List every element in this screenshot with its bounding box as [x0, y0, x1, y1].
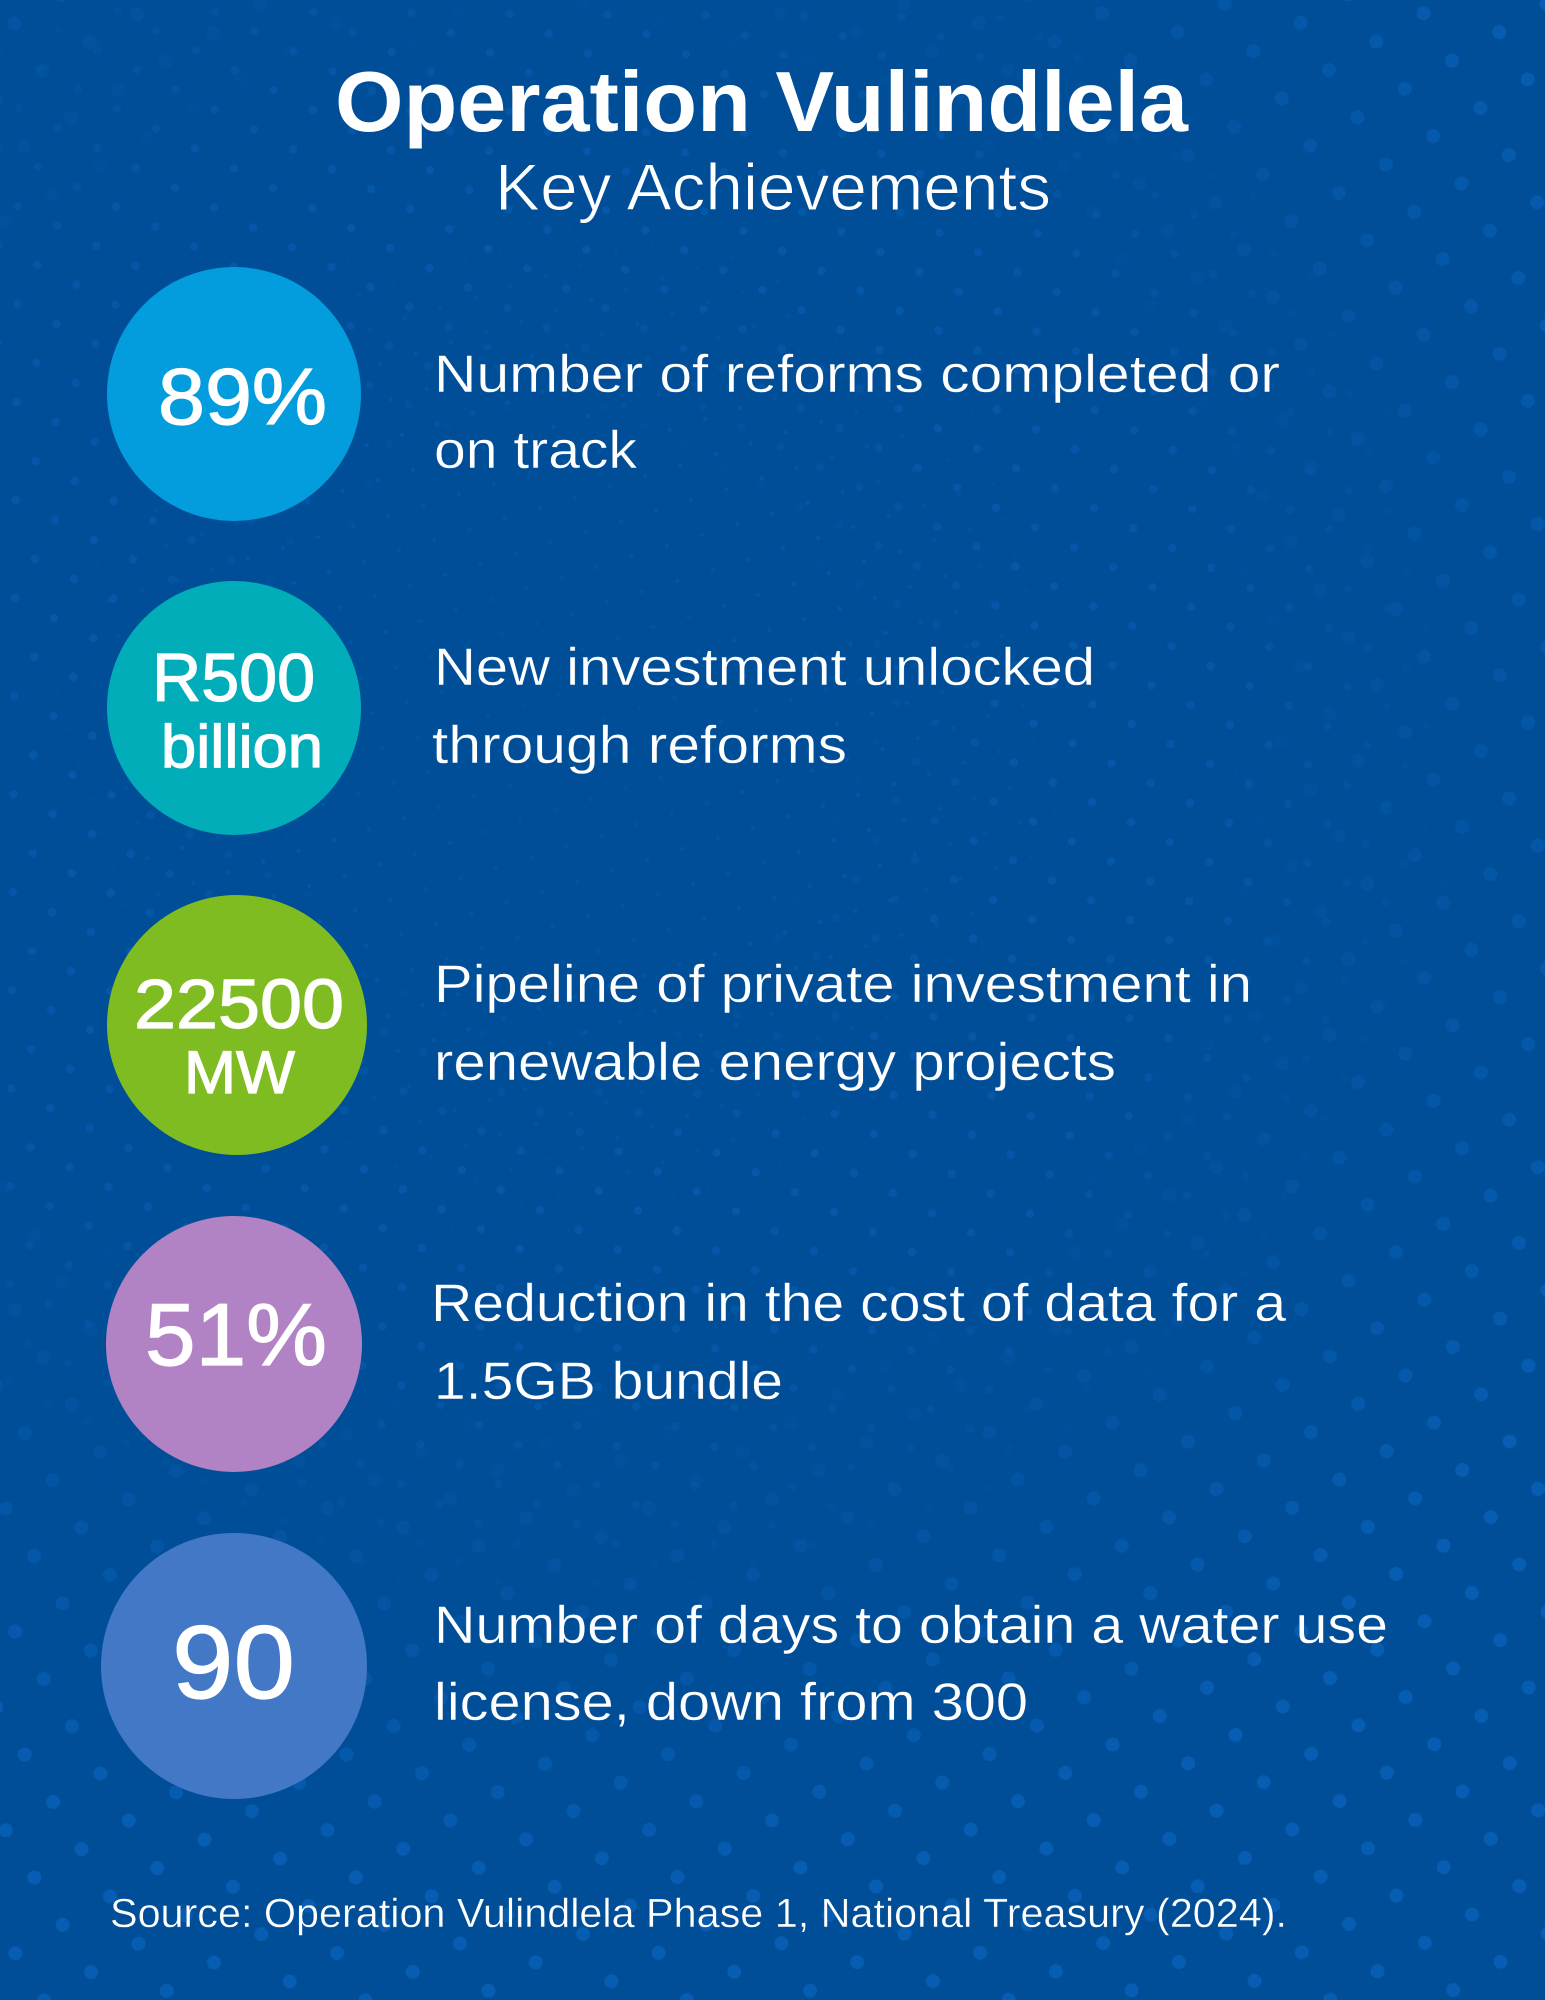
panel: water licence [101, 1533, 1388, 1799]
description: water: license, down from 300 [434, 1673, 1028, 1732]
source note: Source: Operation Vulindlela Phase 1, National Treasury (2024). [110, 1890, 1287, 1936]
stat: 22500: 22500 [134, 965, 344, 1043]
panel: reforms completed [107, 267, 1280, 521]
description: water: Number of days to obtain a water use [434, 1596, 1388, 1655]
description: investment: New investment unlocked [434, 638, 1095, 697]
description: data: Reduction in the cost of data for a [431, 1274, 1287, 1333]
circle badge: 89% [107, 267, 361, 521]
panel: renewable pipeline [107, 895, 1252, 1155]
panel: new investment [107, 581, 1095, 835]
stat: 51%: 51% [145, 1285, 327, 1384]
description: investment: through reforms [432, 716, 847, 775]
description: pipeline: Pipeline of private investment in [434, 955, 1252, 1014]
subtitle: Key Achievements [495, 150, 1051, 224]
description: pipeline: renewable energy projects [434, 1033, 1116, 1092]
description: reforms: Number of reforms completed or [434, 345, 1280, 404]
description: reforms: on track [434, 421, 638, 480]
title: Operation Vulindlela [335, 55, 1189, 150]
circle badge: R500 billion [107, 581, 361, 835]
stat: 89%: 89% [158, 352, 327, 441]
stat unit: billion: billion [161, 713, 323, 780]
panel: data cost [106, 1216, 1287, 1472]
stat: 90: 90 [172, 1605, 295, 1721]
stat: R500: R500 [152, 640, 315, 716]
description: data: 1.5GB bundle [434, 1352, 783, 1411]
circle badge: 51% [106, 1216, 362, 1472]
circle badge: 22500 MW [107, 895, 367, 1155]
stat unit: MW: MW [184, 1039, 295, 1106]
circle badge: 90 [101, 1533, 367, 1799]
